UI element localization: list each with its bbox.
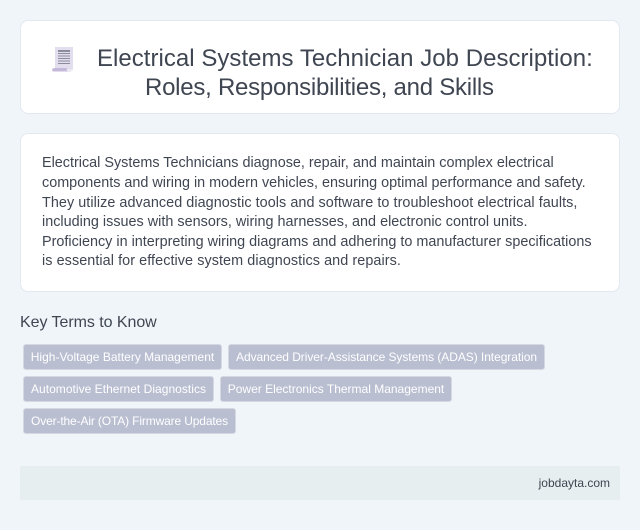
footer source text: jobdayta.com — [539, 476, 610, 490]
panel: description — [20, 133, 620, 292]
title — [97, 45, 593, 101]
footer bar — [20, 466, 620, 500]
description text: They utilize advanced diagnostic tools and software to troubleshoot electrical faults, — [42, 195, 577, 211]
panel: title card — [20, 20, 620, 114]
tag: Power Electronics Thermal Management — [228, 382, 444, 396]
description text: components and wiring in modern vehicles, ensuring optimal performance and safety. — [42, 175, 586, 191]
tag: Advanced Driver-Assistance Systems (ADAS) Integration — [236, 350, 537, 364]
description text: Electrical Systems Technicians diagnose, repair, and maintain complex electrical — [42, 155, 554, 171]
description text — [42, 155, 592, 269]
tag: High-Voltage Battery Management — [31, 350, 214, 364]
description text: including issues with sensors, wiring harnesses, and electronic control units. — [42, 214, 528, 230]
title: Electrical Systems Technician Job Description: — [97, 45, 593, 72]
tag: Automotive Ethernet Diagnostics — [31, 382, 206, 396]
tag — [228, 344, 545, 370]
heading: key terms: Key Terms to Know — [20, 314, 157, 330]
tag — [23, 344, 222, 370]
tag: Over-the-Air (OTA) Firmware Updates — [31, 414, 228, 428]
key terms tag list — [23, 344, 545, 434]
tag — [23, 408, 236, 434]
tag — [220, 376, 452, 402]
description text: is essential for effective system diagnostics and repairs. — [42, 253, 401, 269]
description text: Proficiency in interpreting wiring diagrams and adhering to manufacturer specifications — [42, 234, 592, 250]
title: Roles, Responsibilities, and Skills — [145, 74, 494, 101]
tag — [23, 376, 214, 402]
icon: document scroll — [52, 47, 73, 72]
